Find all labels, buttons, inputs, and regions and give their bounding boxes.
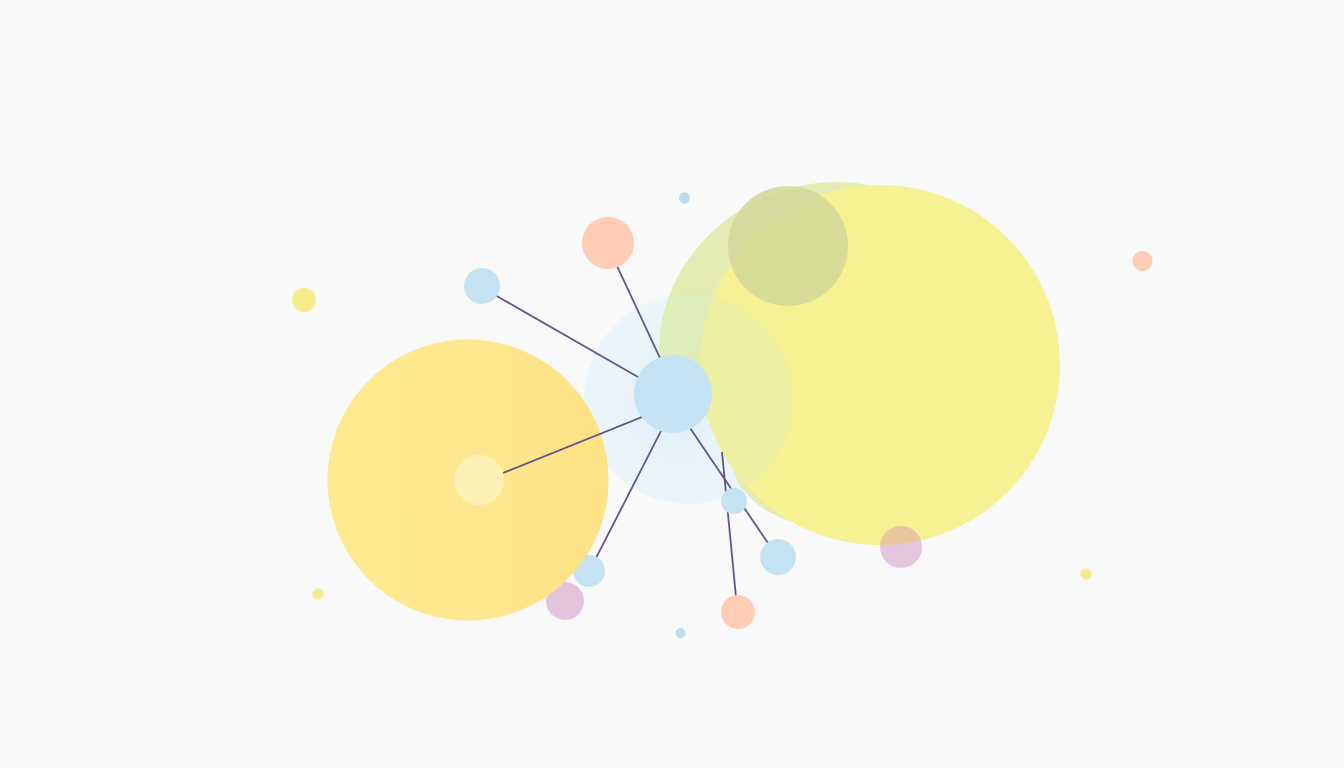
connector from hub to pale yellow node: [503, 417, 642, 473]
halo tint over yellow and green: [700, 297, 794, 486]
orange node top: [582, 217, 634, 269]
connector lines: [495, 266, 770, 597]
small blue node near hub: [721, 488, 747, 514]
blue node upper left: [464, 268, 500, 304]
large yellow circle: [700, 185, 1060, 545]
large pale green blob: [659, 182, 900, 530]
large golden circle: [328, 340, 608, 620]
pale yellow node inside golden circle: [454, 455, 504, 505]
tiny blue dot top: [679, 192, 690, 204]
blue node lower left: [573, 555, 605, 587]
blue node lower right: [760, 539, 796, 575]
orange node bottom: [721, 595, 755, 629]
mauve node on yellow circle edge: [880, 526, 922, 568]
tiny yellow dot right: [1080, 568, 1092, 580]
tiny blue dot bottom: [676, 628, 686, 638]
large pale blue halo circle: [584, 294, 794, 504]
network bubble diagram: [292, 182, 1152, 638]
mauve node behind golden circle: [546, 582, 584, 620]
olive overlap circle: [728, 186, 848, 306]
small orange dot right: [1132, 251, 1152, 271]
small yellow dot left: [292, 288, 316, 312]
tiny yellow dot lower left: [312, 588, 324, 600]
central blue hub node: [634, 355, 712, 433]
